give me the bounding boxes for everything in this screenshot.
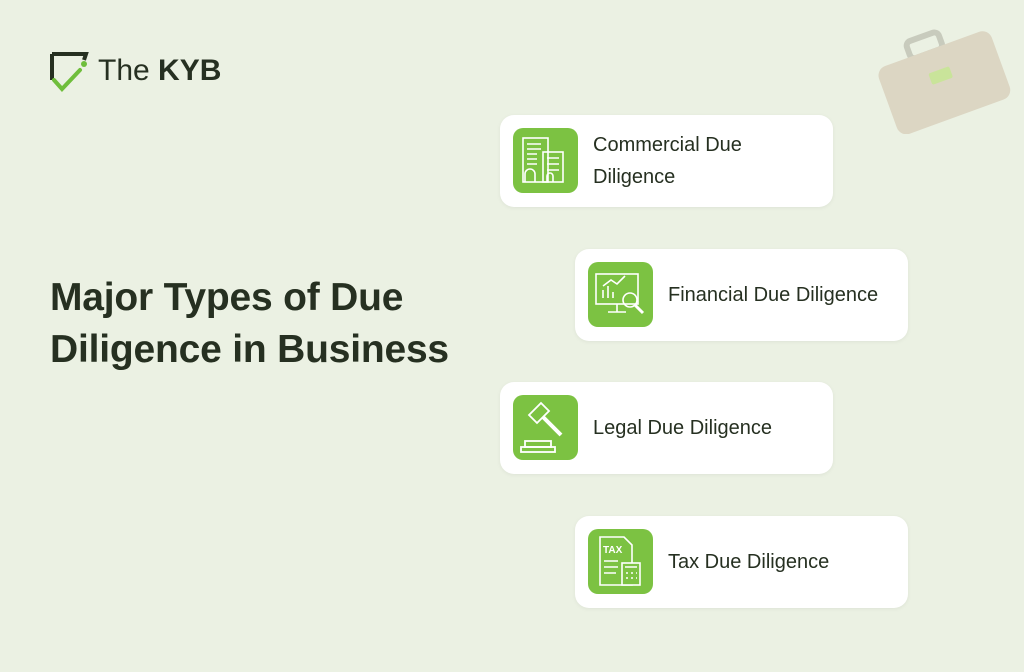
card: commercial: Commercial Due Diligence	[593, 134, 742, 188]
icon: tax document: TAX	[603, 545, 623, 556]
icon: buildings	[513, 128, 578, 193]
card: financial	[575, 249, 908, 341]
icon: chart monitor	[588, 262, 653, 327]
icon: tax document	[588, 529, 653, 594]
icon: gavel	[513, 395, 578, 460]
card: legal: Legal Due Diligence	[593, 417, 772, 439]
decorative briefcase	[878, 30, 1010, 134]
logo: The KYB	[98, 54, 221, 87]
card: tax: Tax Due Diligence	[668, 551, 829, 573]
card: tax	[575, 516, 908, 608]
card: legal	[500, 382, 833, 474]
card: financial: Financial Due Diligence	[668, 284, 878, 306]
logo	[50, 52, 221, 92]
title: Diligence in Business	[50, 328, 449, 371]
card: commercial	[500, 115, 833, 207]
title	[50, 276, 449, 371]
title: Major Types of Due	[50, 276, 403, 319]
